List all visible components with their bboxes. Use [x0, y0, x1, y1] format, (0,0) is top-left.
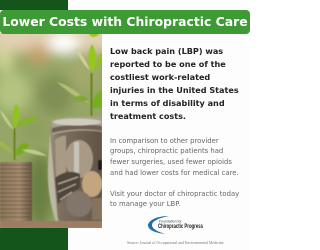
intro bold paragraph: treatment costs. [110, 111, 186, 121]
icon: right seedling [57, 33, 102, 116]
icon: left coin stack [0, 162, 32, 222]
comparison paragraph [110, 136, 239, 177]
call to action paragraph: Visit your doctor of chiropractic today [110, 190, 239, 198]
source note: Source: Journal of Occupational and Environmental Medicine [127, 241, 224, 245]
intro bold paragraph: in terms of disability and [110, 98, 225, 108]
photo: coins and seedlings [0, 33, 102, 228]
comparison paragraph: fewer surgeries, used fewer opioids [110, 158, 232, 166]
intro bold paragraph: injuries in the United States [110, 85, 239, 95]
intro bold paragraph: costliest work-related [110, 72, 210, 82]
logo: Foundation for Chiropractic Progress [148, 216, 203, 234]
call to action paragraph [110, 190, 239, 208]
comparison paragraph: In comparison to other provider [110, 136, 219, 144]
call to action paragraph: to manage your LBP. [110, 200, 180, 208]
table surface [0, 221, 102, 228]
icon: left seedling [0, 104, 47, 160]
intro bold paragraph: reported to be one of the [110, 59, 226, 69]
header banner [0, 10, 250, 34]
intro bold paragraph [110, 46, 239, 121]
comparison paragraph: and had lower costs for medical care. [110, 169, 239, 177]
header banner: Lower Costs with Chiropractic Care [2, 14, 248, 29]
comparison paragraph: groups, chiropractic patients had [110, 147, 223, 155]
bottom dark green block [0, 228, 68, 250]
logo: Foundation for Chiropractic Progress: Foundation for [159, 220, 182, 224]
top dark green block [0, 0, 68, 10]
icon: glass jar of coins [48, 116, 102, 222]
intro bold paragraph: Low back pain (LBP) was [110, 46, 223, 56]
